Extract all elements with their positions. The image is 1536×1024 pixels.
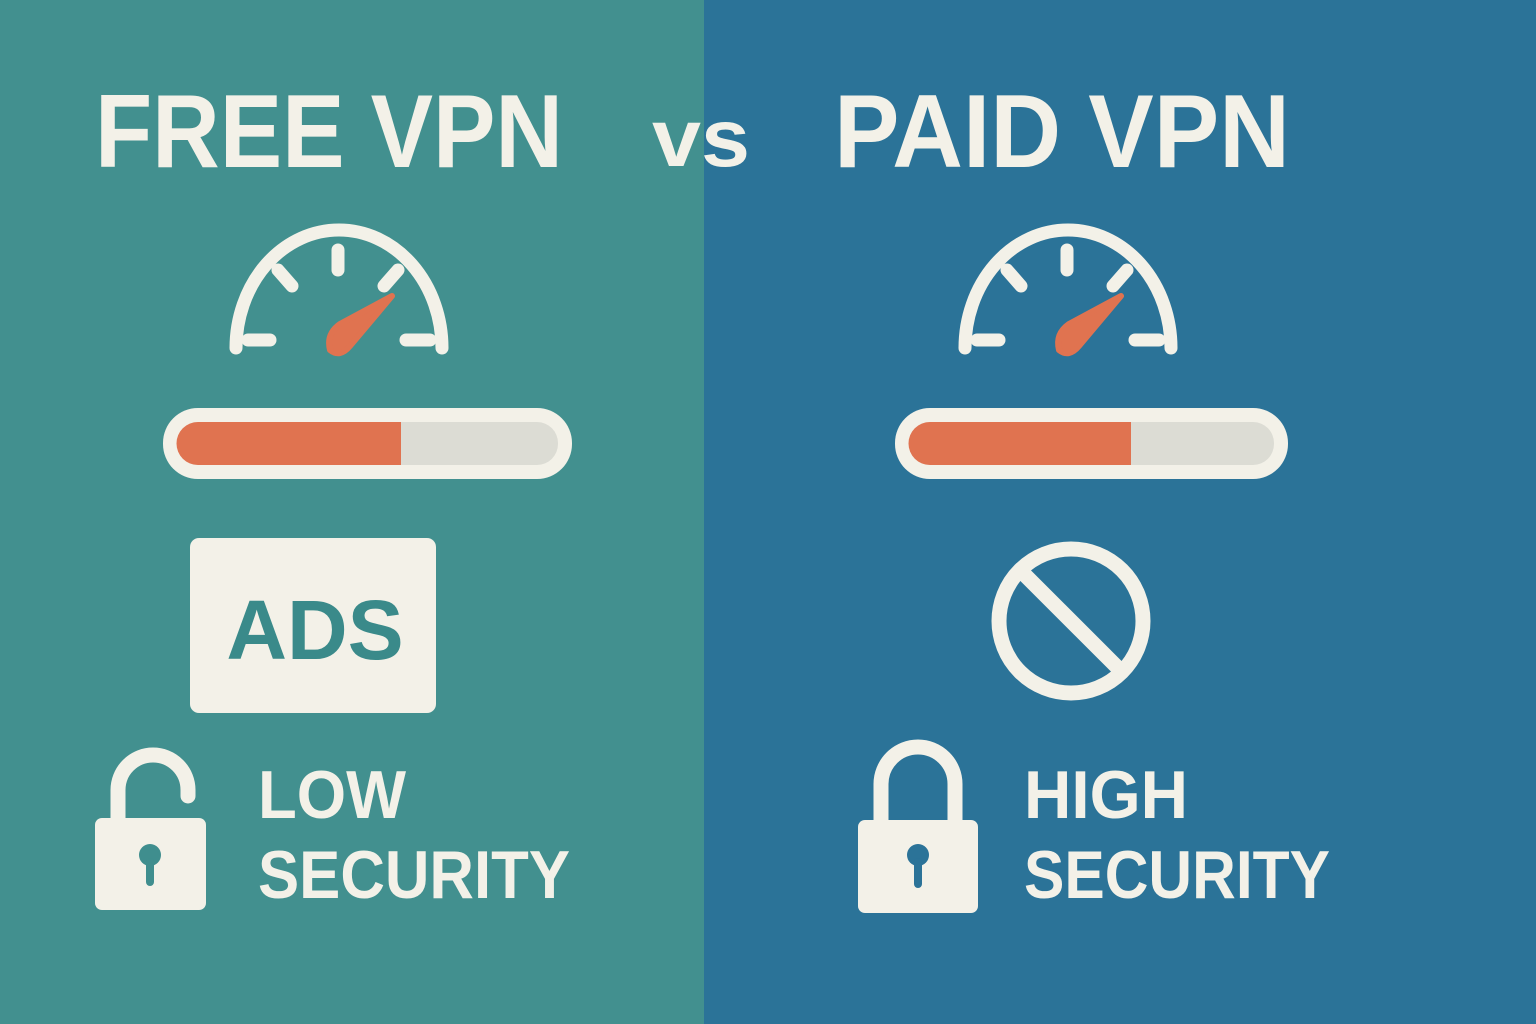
progress bar: paid <box>895 408 1288 479</box>
text: high security: HIGH <box>1024 757 1188 833</box>
icon: paid speedometer <box>965 230 1171 353</box>
panel: paid vpn background <box>704 0 1536 1024</box>
icon: ads box: ADS <box>226 583 404 677</box>
icon: ads box <box>190 538 436 713</box>
panel: free vpn background <box>0 0 704 1024</box>
title: free vpn: FREE VPN <box>95 74 563 190</box>
text: low security: LOW <box>258 757 407 833</box>
text: low security: SECURITY <box>258 837 570 913</box>
icon: open lock <box>95 755 206 910</box>
progress bar: free <box>163 408 572 479</box>
text: low security <box>258 757 570 913</box>
text: high security <box>1024 757 1330 913</box>
icon: free speedometer <box>236 230 442 353</box>
icon: no ads sign <box>999 549 1143 693</box>
icon: closed lock <box>858 747 978 913</box>
text: high security: SECURITY <box>1024 837 1330 913</box>
title: vs: vs <box>652 93 750 184</box>
title: paid vpn: PAID VPN <box>834 74 1290 190</box>
